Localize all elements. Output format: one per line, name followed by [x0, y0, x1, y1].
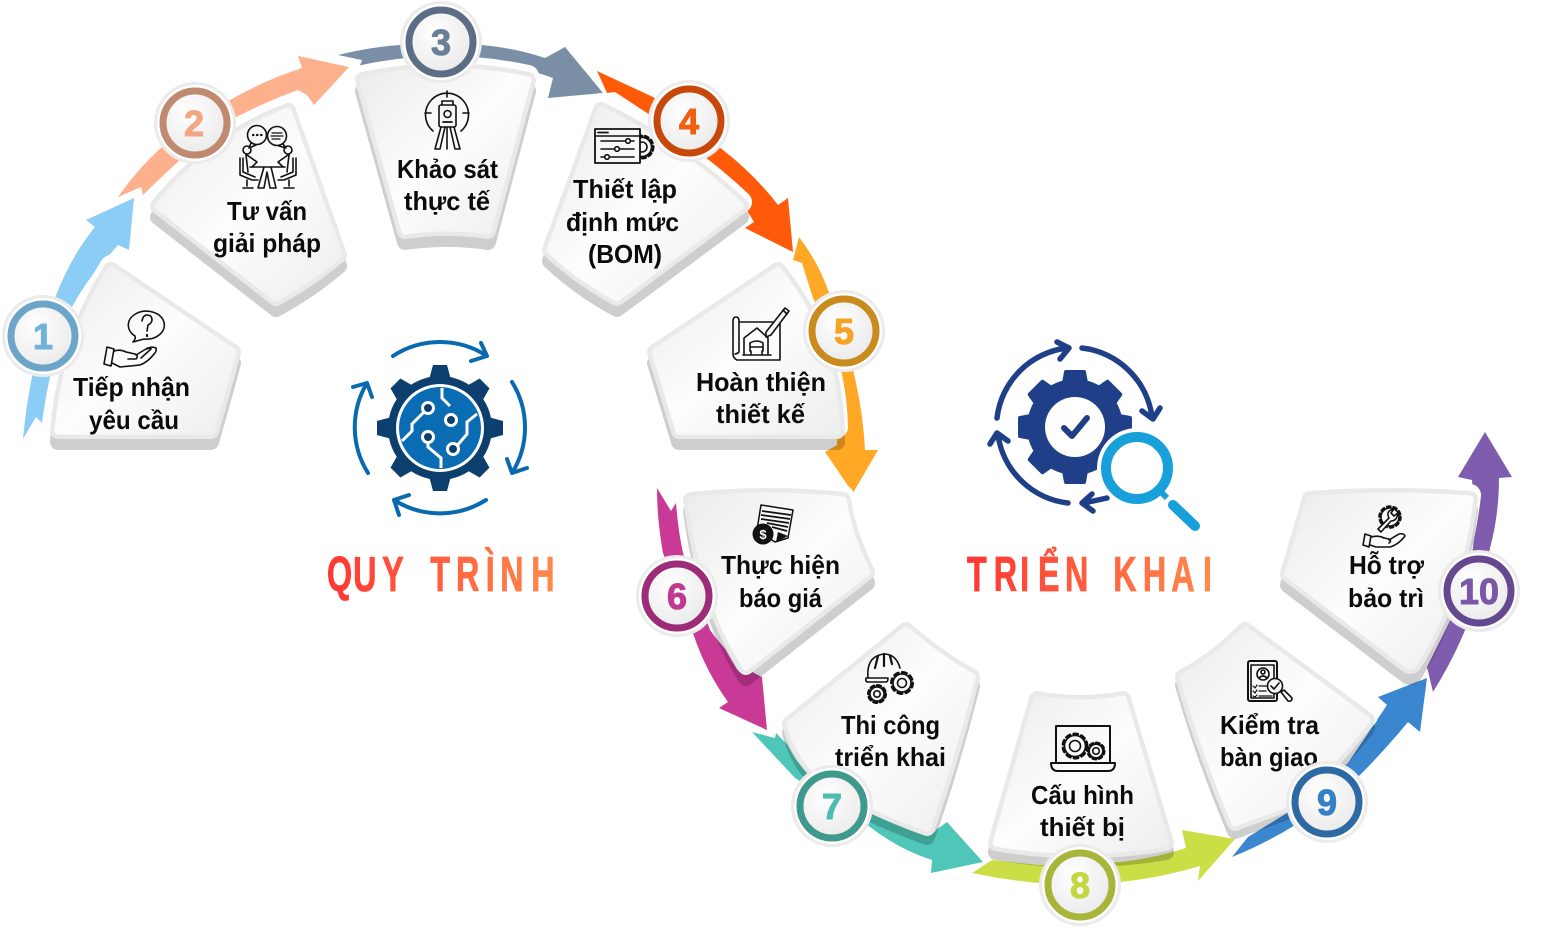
arrow 2: peach — [118, 56, 349, 197]
number badge 3: 3 — [431, 22, 451, 63]
step card 6: Thực hiện báo giá — [691, 492, 867, 678]
step card 9: Kiểm tra bàn giao — [1183, 626, 1367, 831]
step card 2: Tư vấn giải pháp — [158, 107, 339, 309]
number badge 7 — [791, 765, 873, 847]
number badge 8 — [1039, 844, 1121, 926]
icon: price document with dollar coin — [752, 505, 793, 544]
step card 3: Khảo sát thực tế — [363, 67, 528, 242]
number badge 6 — [636, 555, 718, 637]
step card 10: Hỗ trợ bảo trì — [1288, 492, 1470, 677]
label line 2: yêu cầu — [89, 405, 179, 435]
number badge 9 — [1286, 761, 1368, 843]
icon: blueprint with pencil — [733, 308, 789, 360]
icon: gear, wrench and hand — [1363, 506, 1405, 547]
icon: laptop with gears — [1051, 726, 1115, 771]
label line 2: bảo trì — [1348, 583, 1424, 613]
arrow 1: light blue — [23, 198, 134, 439]
label line 2: thiết kế — [716, 399, 806, 429]
label: Tiếp nhận — [73, 372, 190, 402]
number badge 2 — [154, 82, 236, 164]
label: Thiết lập — [573, 174, 677, 204]
title: QUY TRÌNH: QUY TRÌNH — [327, 546, 555, 602]
number badge 7: 7 — [822, 786, 842, 827]
icon: settings window with gear — [595, 129, 653, 163]
arrow 6: magenta — [657, 488, 767, 730]
number badge 5: 5 — [834, 311, 854, 352]
arrow 5: amber — [793, 237, 878, 493]
arrow 9: blue — [1232, 678, 1427, 857]
step card 8: Cấu hình thiết bị — [996, 695, 1166, 860]
label: Thi công — [841, 710, 940, 740]
number badge 4 — [648, 80, 730, 162]
title: TRIỂN KHAI: TRIỂN KHAI — [967, 546, 1212, 602]
icon: question bubble and hand — [104, 311, 164, 367]
arrow 8: lime — [972, 830, 1235, 883]
number badge 3 — [400, 1, 482, 83]
label line 2: báo giá — [739, 583, 822, 613]
label: Thực hiện — [721, 550, 840, 580]
label: Hỗ trợ — [1349, 550, 1424, 580]
label: Cấu hình — [1031, 780, 1134, 810]
arrow 4: orange — [597, 71, 793, 252]
number badge 2: 2 — [184, 103, 204, 144]
number badge 5 — [803, 290, 885, 372]
icon: circuit gear with cycle arrows — [353, 342, 527, 515]
icon: two people talking at a table — [240, 126, 296, 188]
label line 2: định mức — [566, 207, 679, 237]
number badge 8: 8 — [1070, 865, 1090, 906]
label: Hoàn thiện — [696, 367, 826, 397]
label line 2: giải pháp — [213, 228, 321, 258]
step card 1: Tiếp nhận yêu cầu — [58, 266, 233, 442]
icon: checklist with magnifier — [1248, 661, 1292, 701]
number badge 1 — [2, 295, 84, 377]
label line 2: thực tế — [404, 186, 491, 216]
label line 3: (BOM) — [588, 239, 662, 269]
icon: helmet with gears — [866, 654, 912, 702]
number badge 10 — [1438, 550, 1520, 632]
step card 7: Thi công triển khai — [790, 626, 972, 837]
icon: surveying total station on tripod — [425, 91, 469, 149]
number badge 10: 10 — [1459, 571, 1499, 612]
label: Khảo sát — [397, 154, 498, 184]
step card 5: Hoàn thiện thiết kế — [655, 266, 837, 442]
number badge 9: 9 — [1317, 782, 1337, 823]
label line 2: bàn giao — [1220, 742, 1318, 772]
label line 2: triển khai — [835, 742, 946, 772]
number badge 6: 6 — [667, 576, 687, 617]
arrow 3: slate — [338, 45, 603, 98]
label line 2: thiết bị — [1040, 812, 1125, 842]
number badge 4: 4 — [679, 101, 699, 142]
dollar sign: $ — [759, 527, 767, 542]
arrow 7: teal — [752, 732, 983, 873]
label: Tư vấn — [227, 196, 307, 226]
step card 4: Thiết lập định mức (BOM) — [550, 106, 741, 309]
arrow 10: purple — [1427, 432, 1512, 692]
icon: gear with check and magnifier — [990, 342, 1195, 526]
number badge 1: 1 — [33, 316, 53, 357]
label: Kiểm tra — [1220, 710, 1320, 740]
